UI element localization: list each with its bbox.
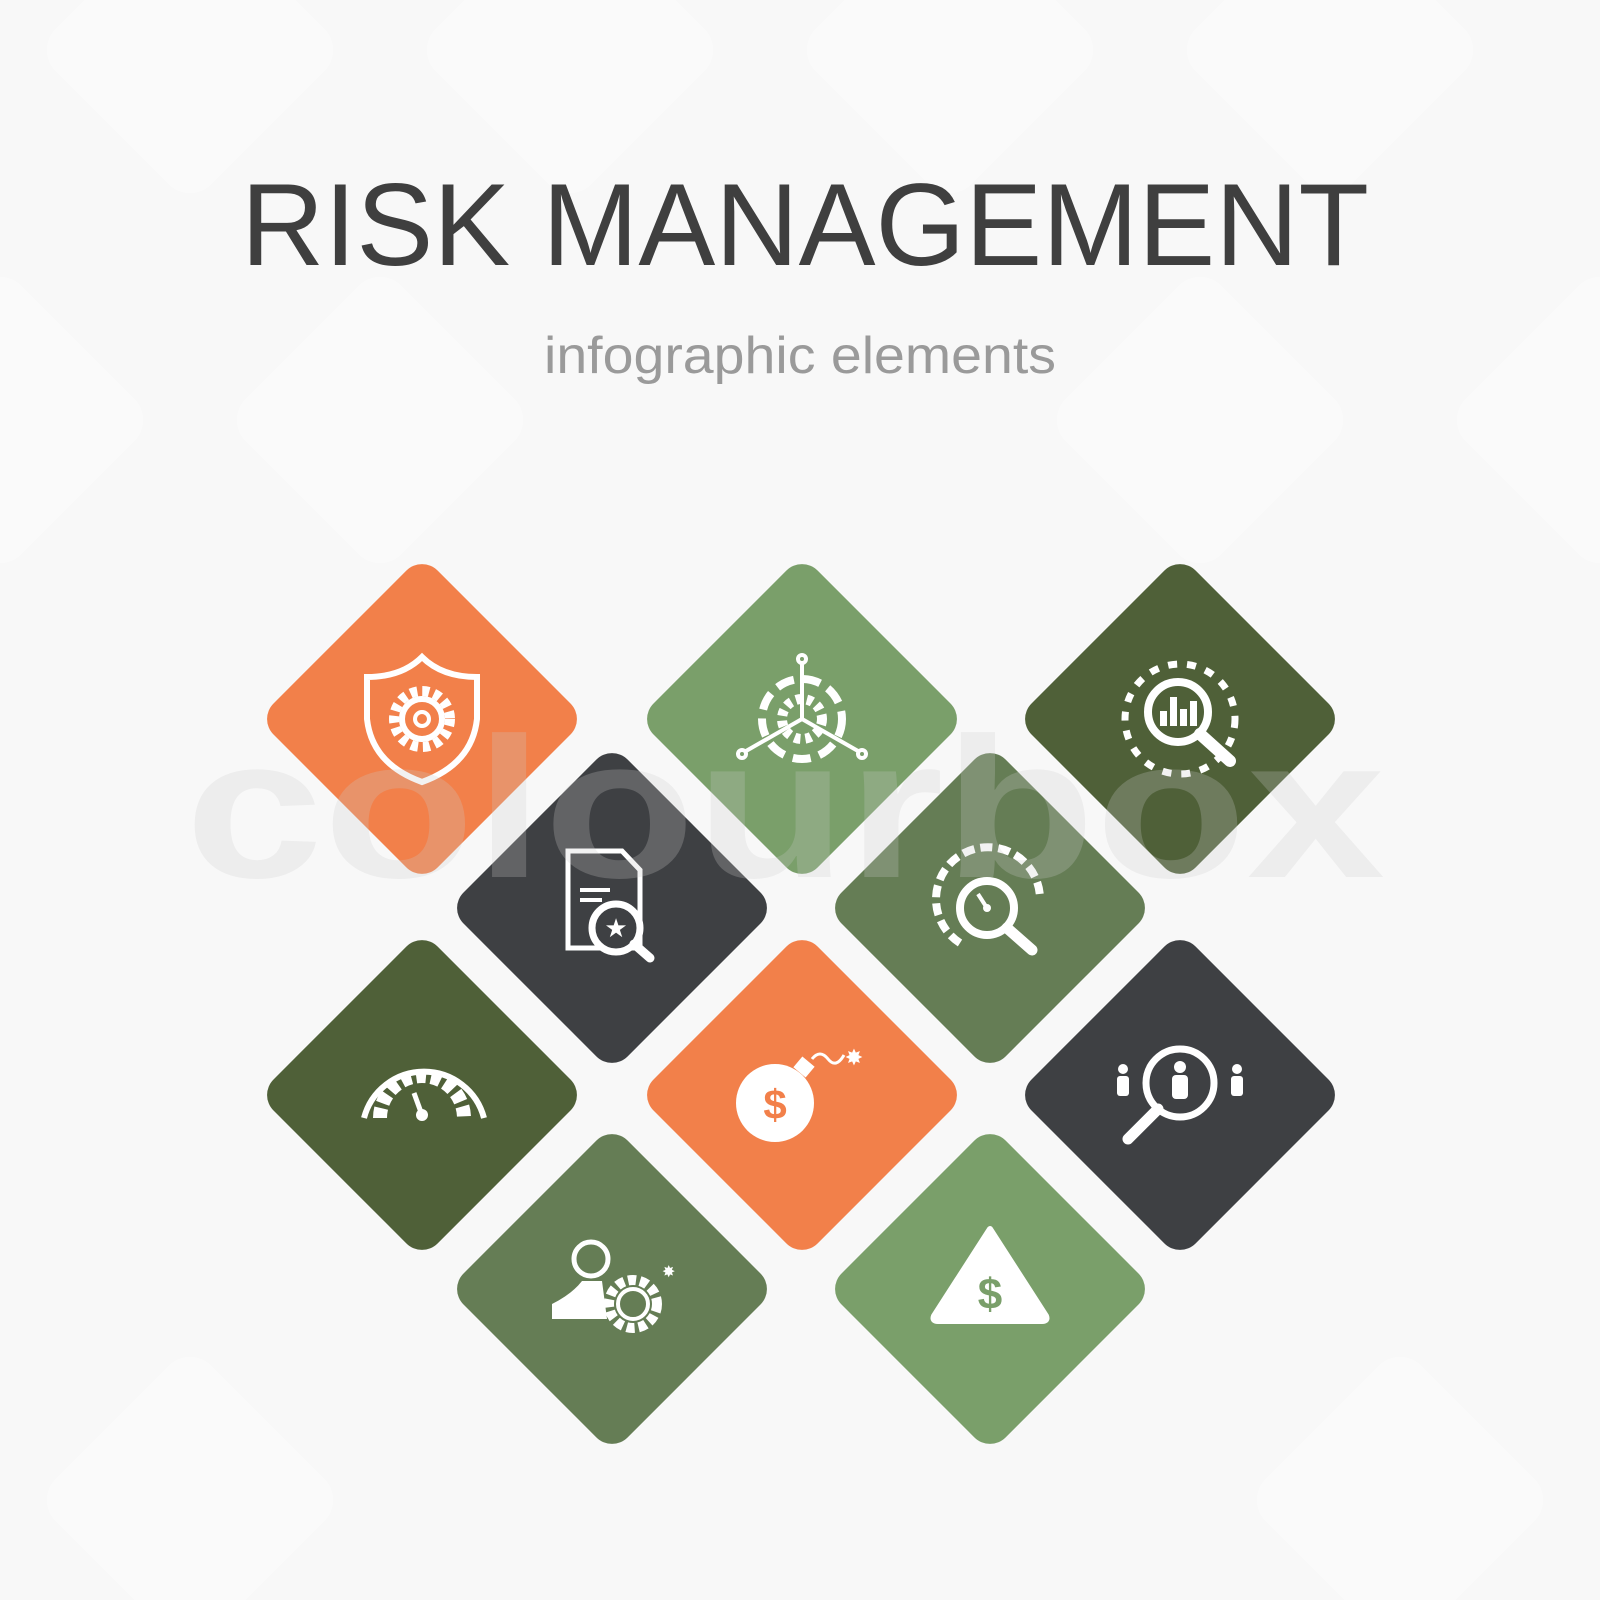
watermark: colourbox xyxy=(185,697,1385,920)
diamond 1: shield gear xyxy=(258,555,586,883)
diamond 7: money bomb: ✸ xyxy=(845,1045,863,1070)
diamond 5: gauge search xyxy=(826,744,1154,1072)
diamond 7: money bomb: $ xyxy=(763,1081,787,1128)
title: RISK MANAGEMENT xyxy=(241,159,1369,290)
diamond 10: money warning: $ xyxy=(978,1270,1002,1319)
diamond 9: person gear: ✸ xyxy=(662,1264,675,1281)
subtitle: infographic elements xyxy=(544,327,1056,385)
diamond 3: magnifier chart xyxy=(1016,555,1344,883)
diamond 9: person gear xyxy=(448,1125,776,1453)
diamond 8: people search xyxy=(1016,931,1344,1259)
diamond 4: document search xyxy=(448,744,776,1072)
diamond 10: money warning xyxy=(826,1125,1154,1453)
diamond 7: money bomb xyxy=(638,931,966,1259)
diamond 6: speedometer xyxy=(258,931,586,1259)
diamond 4: document search: ★ xyxy=(604,913,628,943)
diamond 2: gear network xyxy=(638,555,966,883)
